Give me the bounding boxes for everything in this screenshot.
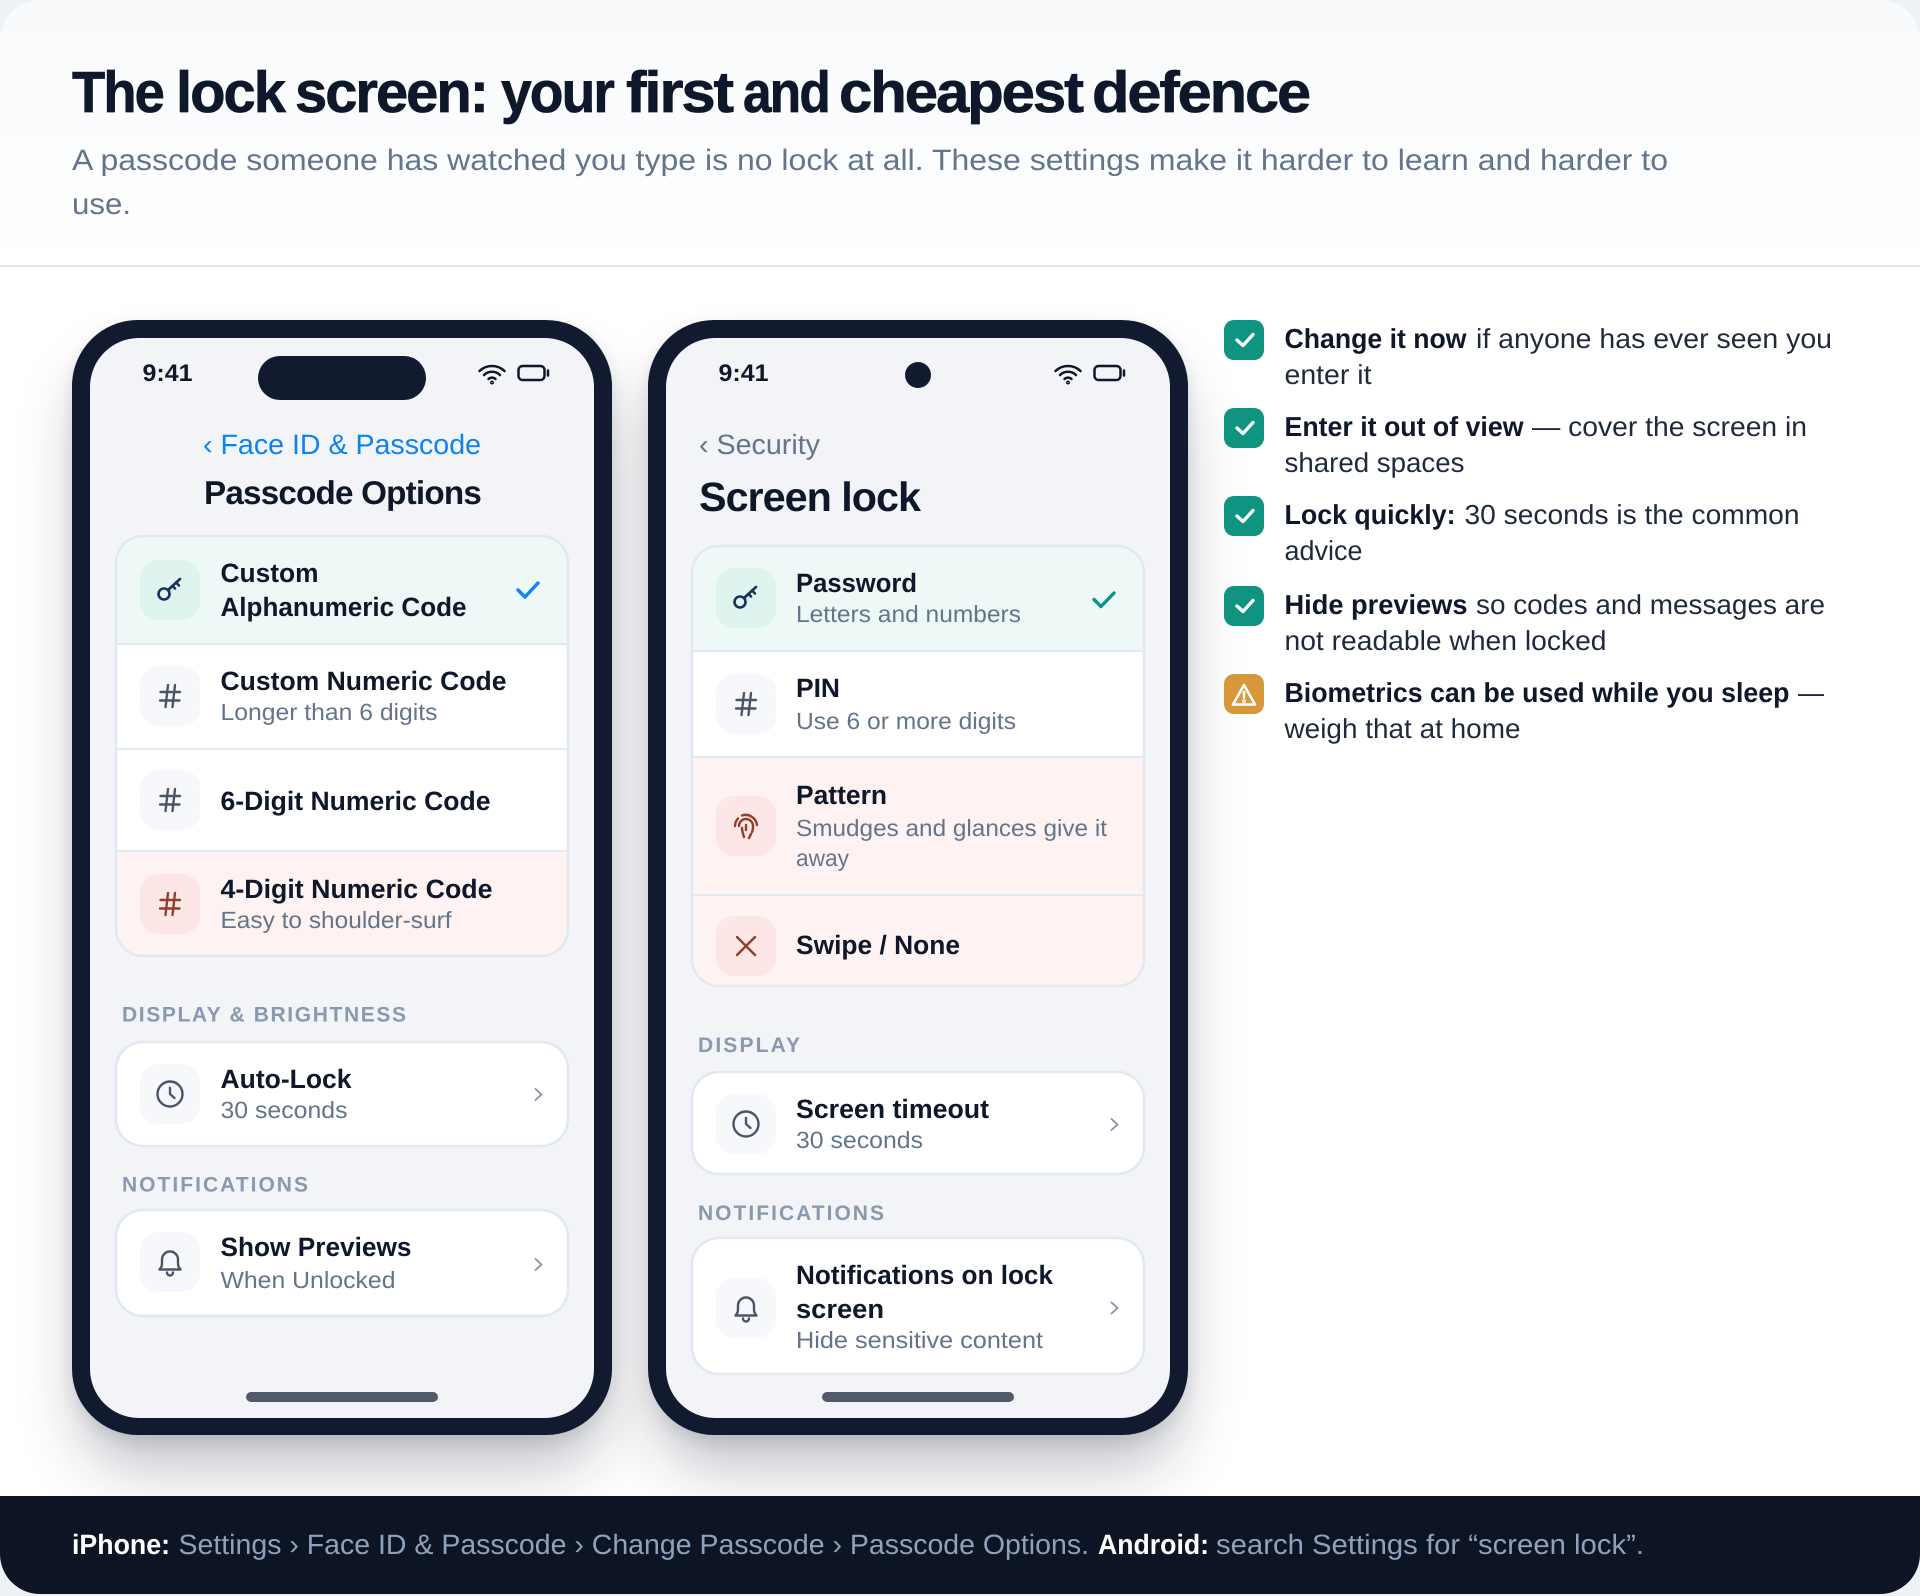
row: password xyxy=(716,568,1114,628)
panel: advice checklist xyxy=(1224,320,1832,744)
title: defence xyxy=(1092,60,1310,125)
panel: auto-lock: Auto-Lock xyxy=(220,1064,352,1094)
item: enter it out of view: shared spaces xyxy=(1284,447,1464,478)
item: change it now: Change it now xyxy=(1284,323,1467,354)
item: hide previews: not readable when locked xyxy=(1284,625,1606,656)
row: custom numeric code: Custom Numeric Code xyxy=(220,666,506,696)
panel: screen timeout: Screen timeout xyxy=(796,1094,989,1124)
footer bar: search Settings for “screen lock”. xyxy=(1216,1529,1644,1560)
section label: NOTIFICATIONS xyxy=(698,1202,884,1225)
row: PIN xyxy=(716,673,1016,734)
icon: clock xyxy=(716,1094,776,1154)
dynamic island xyxy=(258,356,426,400)
item: change it now: if anyone has ever seen you xyxy=(1476,323,1832,354)
subtitle xyxy=(72,144,1668,221)
title: screen: xyxy=(295,60,487,125)
icon: chevron xyxy=(1112,1302,1118,1314)
item: biometrics warning: weigh that at home xyxy=(1283,713,1520,744)
icon: selected check xyxy=(518,583,538,597)
row: password: Password xyxy=(796,568,917,598)
icon: hash xyxy=(140,770,200,830)
icon: hash xyxy=(716,674,776,734)
header panel xyxy=(0,0,1920,267)
footer bar: Settings › Face ID & Passcode › Change Passcode › Passcode Options. xyxy=(178,1529,1089,1560)
section label: DISPLAY & BRIGHTNESS xyxy=(122,1004,406,1026)
icon: battery xyxy=(518,366,548,380)
footer bar xyxy=(0,1496,1920,1594)
panel: show previews: When Unlocked xyxy=(220,1267,396,1293)
item: lock quickly: 30 seconds is the common xyxy=(1464,499,1800,530)
icon: bell xyxy=(140,1232,200,1292)
title: your xyxy=(501,60,614,125)
row: PIN: PIN xyxy=(796,673,840,703)
row: PIN: Use 6 or more digits xyxy=(796,708,1016,734)
row: custom alphanumeric code: Custom xyxy=(220,558,318,588)
icon: chevron xyxy=(1112,1119,1118,1130)
panel: phone 1 passcode options xyxy=(72,320,612,1435)
panel: passcode types list xyxy=(115,535,569,957)
icon: battery xyxy=(1094,366,1124,380)
panel: show previews xyxy=(116,1210,568,1316)
icon: key xyxy=(140,560,200,620)
home indicator xyxy=(822,1392,1014,1402)
panel: screen timeout: 30 seconds xyxy=(796,1127,923,1153)
item: hide previews: Hide previews xyxy=(1284,589,1468,620)
icon: cross xyxy=(716,916,776,976)
row: swipe / none: Swipe / None xyxy=(796,930,960,960)
status time: 9:41 xyxy=(718,360,768,387)
panel: notifications on lock screen: Hide sensitive content xyxy=(796,1327,1044,1353)
title: cheapest xyxy=(839,60,1084,125)
row: 4-digit numeric code: Easy to shoulder-surf xyxy=(220,907,452,933)
icon: chevron xyxy=(536,1259,542,1270)
back link: ‹ Security xyxy=(699,429,820,460)
panel: notifications on lock screen xyxy=(692,1238,1144,1374)
item: change it now xyxy=(1224,320,1832,390)
icon: fingerprint xyxy=(716,796,776,856)
title: lock xyxy=(176,60,287,125)
status time: 9:41 xyxy=(142,360,192,387)
row: password: Letters and numbers xyxy=(796,601,1021,627)
title: The xyxy=(72,60,164,125)
row: custom numeric code: Longer than 6 digits xyxy=(220,699,438,725)
item: enter it out of view xyxy=(1224,408,1807,478)
item: hide previews xyxy=(1224,586,1825,656)
screen heading: Screen lock xyxy=(699,474,921,520)
item: enter it out of view: Enter it out of view xyxy=(1284,411,1524,442)
icon: clock xyxy=(140,1064,200,1124)
icon: wifi xyxy=(1056,366,1080,383)
icon: bell xyxy=(716,1278,776,1338)
panel: phone 2 screen lock xyxy=(648,320,1188,1435)
section label: DISPLAY xyxy=(698,1034,800,1057)
item: lock quickly: Lock quickly: xyxy=(1284,499,1456,530)
icon: key xyxy=(716,568,776,628)
item: lock quickly: advice xyxy=(1284,535,1362,566)
row: 4-digit numeric code: 4-Digit Numeric Code xyxy=(220,874,492,904)
panel: show previews: Show Previews xyxy=(220,1232,412,1262)
back link: ‹ Face ID & Passcode xyxy=(203,429,481,460)
row: custom alphanumeric code xyxy=(140,558,538,622)
footer bar: Android: xyxy=(1098,1529,1209,1560)
footer bar: iPhone: xyxy=(72,1529,170,1560)
subtitle: use. xyxy=(72,188,131,221)
panel: notifications on lock screen: screen xyxy=(796,1294,884,1324)
icon: wifi xyxy=(480,366,504,383)
item: biometrics warning: Biometrics can be used while you sleep xyxy=(1284,677,1790,708)
subtitle: A passcode someone has watched you type is no lock at all. These settings make it harder to learn and harder to xyxy=(72,144,1668,177)
row: 4-digit numeric code xyxy=(140,874,492,934)
row: pattern: Pattern xyxy=(796,780,887,810)
item: biometrics warning xyxy=(1224,674,1824,744)
row: 6-digit numeric code: 6-Digit Numeric Code xyxy=(220,786,490,816)
screen heading: Passcode Options xyxy=(204,474,481,511)
row: pattern: away xyxy=(796,845,849,871)
row: pattern xyxy=(716,780,1107,871)
row: custom numeric code xyxy=(140,666,506,726)
title xyxy=(72,60,1310,125)
item: biometrics warning: — xyxy=(1798,677,1824,708)
icon: hash warning xyxy=(140,874,200,934)
panel: lock types list xyxy=(691,545,1145,987)
item: enter it out of view: — cover the screen in xyxy=(1532,411,1807,442)
item: lock quickly xyxy=(1224,496,1800,566)
item: change it now: enter it xyxy=(1284,359,1372,390)
icon: chevron xyxy=(536,1089,542,1100)
panel: screen timeout xyxy=(692,1072,1144,1174)
icon: selected check xyxy=(1094,593,1114,606)
camera punch-hole xyxy=(905,362,931,388)
row: custom alphanumeric code: Alphanumeric Code xyxy=(220,592,466,622)
row: 6-digit numeric code xyxy=(140,770,490,830)
row: swipe / none xyxy=(716,916,960,976)
panel: auto-lock xyxy=(116,1042,568,1146)
title: first xyxy=(626,60,734,125)
section label: NOTIFICATIONS xyxy=(122,1174,308,1196)
title: and xyxy=(743,60,829,125)
panel: notifications on lock screen: Notifications on lock xyxy=(796,1260,1053,1290)
panel: auto-lock: 30 seconds xyxy=(220,1097,348,1123)
icon: hash xyxy=(140,666,200,726)
item: hide previews: so codes and messages are xyxy=(1476,589,1825,620)
home indicator xyxy=(246,1392,438,1402)
row: pattern: Smudges and glances give it xyxy=(796,815,1107,841)
